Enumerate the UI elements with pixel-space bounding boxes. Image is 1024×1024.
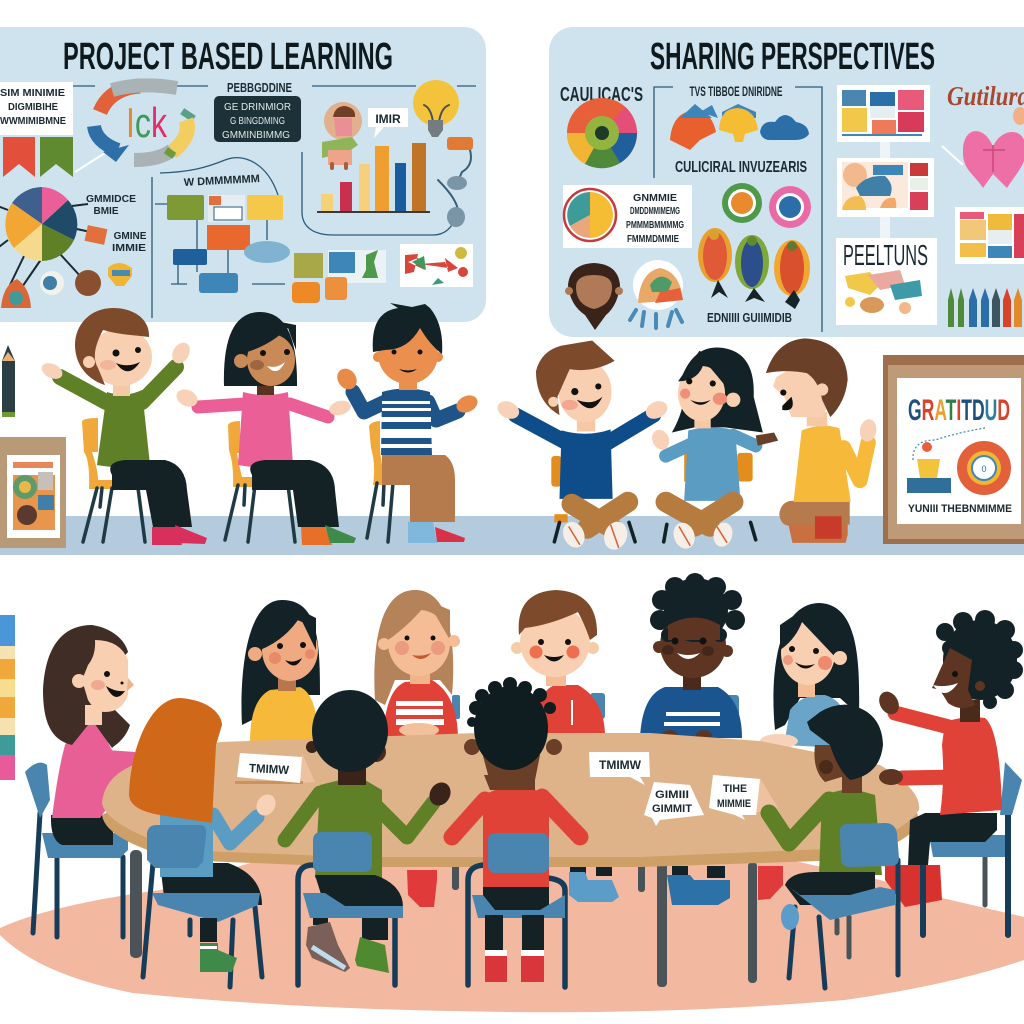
child: dark-haired boy in green, back view [285,690,455,985]
cultural icons row: CULICIRAL INVUZEARIS [675,159,807,176]
colour wheel with label: CAULICAC'S [560,84,643,106]
floor strip [0,516,1024,555]
gratitude board: 0 [981,464,987,474]
food dome icon and label: EDNIIII GUIIMIDIB [707,310,792,325]
name card 3: GIMMIT [652,803,692,815]
panel: sharing perspectives [549,27,1024,337]
cultural icons row: TVS TIBBOE DNIRIDNE [690,83,782,99]
small poster right [955,207,1024,264]
child: girl in pink top [174,312,356,545]
child portrait icon [322,102,362,168]
note card with ribbons [0,82,73,177]
panel: project based learning [0,27,486,322]
dark label card: PEBBGDDINE [227,80,292,95]
colour wheel with label [560,84,643,168]
icon: wall pencil [2,345,15,417]
small pie labels: IMMIE [112,243,146,254]
flowchart [155,158,290,293]
shoes under the table [407,865,942,907]
small pie labels: GMINE [114,231,147,242]
dark label card: GMMINBIMMG [222,130,290,141]
dark label card [214,80,301,142]
compass note card: DMDDMMIMEMG [630,206,680,217]
cycle diagram [75,85,190,172]
child: girl in red striped top [374,590,460,740]
child: boy in green sweater [39,308,207,545]
note card with ribbons: WWMIMIBMNE [0,116,66,127]
child: girl in blue top [760,603,859,748]
child: curly-haired child in red, back view [452,677,580,987]
name card 4 [709,775,778,820]
name card 2 [589,752,650,785]
food dome icon and label [630,260,792,328]
table legs [130,850,757,987]
perspectives poster [836,238,937,325]
dark label card: GE DRINMIOR [224,102,291,113]
cultural icons row [670,83,809,176]
compass note card: PMMMBMMMMG [626,220,684,231]
lightbulb icon [413,80,459,137]
gratitude board [883,355,1024,544]
gratitude heading and heart [942,81,1024,188]
small pie labels: BMIE [94,206,119,217]
child: girl orange hair, back view [129,698,279,987]
heading: project based learning: PROJECT BASED LEARNING [63,36,393,78]
dark label card: G BINGDMING [230,116,285,127]
table [102,733,919,867]
perspectives poster: PEELTUNS [843,240,928,272]
small speech label [368,108,408,138]
coloured pencils [948,288,1022,327]
name card 2: TMIMW [599,758,642,772]
child: boy with curly hair in navy top [640,573,745,742]
bar chart [317,143,430,212]
gratitude board: GRATITDUD [908,394,1010,427]
chair: left girl [25,763,128,937]
name card 1 [235,753,315,784]
name card 4: MIMMIE [717,798,751,810]
cycle diagram: Ick [126,99,168,146]
name card 3 [644,782,704,826]
child portrait [565,263,623,330]
flowchart: W DMMMMMM [184,173,260,189]
child: boy in red top [511,590,605,737]
flower badges [722,183,811,228]
name card 3: GIMIII [655,789,689,801]
compass note card: FMMMDMMIE [627,234,679,245]
three bird figures [698,228,810,309]
compass note card [563,185,692,248]
table name cards [235,752,778,826]
gratitude board: YUNIII THEBNMIMME [908,503,1012,515]
child: girl in yellow top [241,600,320,742]
chair: right child [923,762,1022,935]
small speech label: IMIR [375,112,401,126]
child: boy in striped sweater [333,303,480,543]
name card 1: TMIMW [249,761,290,777]
child: right child with curly hair in red [875,610,1023,865]
child: boy in blue sweater [495,340,670,553]
small pie labels [85,194,147,254]
child: girl in light blue top [649,348,778,552]
small wall poster [0,437,66,548]
note card with ribbons: SIM MINIMIE [0,88,65,99]
small pie labels: GMMIDCE [86,194,136,205]
child: boy in yellow sweater [766,338,878,543]
sticky notes row [292,244,473,303]
note card with ribbons: DIGMIBIHE [8,102,58,113]
compass note card: GNMMIE [633,193,677,204]
poster cards column [837,85,934,217]
wall poster strip bottom left [0,615,15,780]
floor rug [0,860,1024,1012]
cables and plugs [438,137,473,227]
child: dark-haired boy in green at right, back view [769,705,899,988]
child: girl in pink top at left [43,625,135,845]
name card 4: TIHE [723,783,747,795]
pie chart with connected nodes [0,187,132,308]
